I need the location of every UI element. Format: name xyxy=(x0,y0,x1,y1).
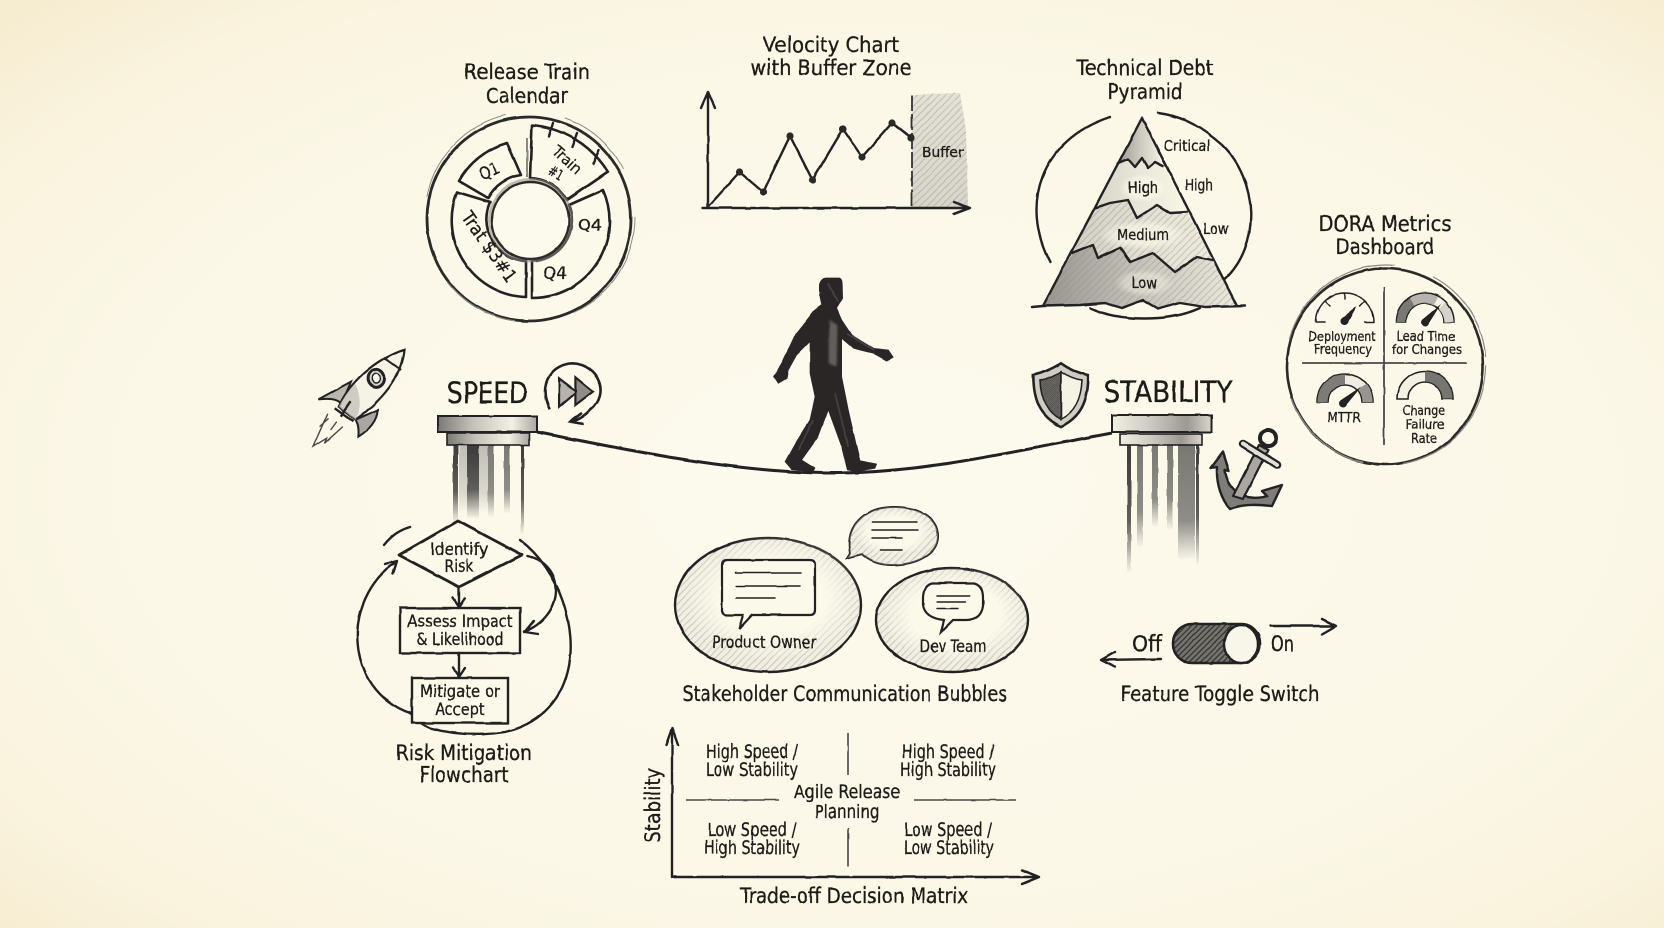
right pillar xyxy=(1112,415,1212,573)
heading: DORA metrics: DORA Metrics xyxy=(1318,212,1452,236)
label: off: Off xyxy=(1132,632,1163,656)
heading: velocity chart: Velocity Chart xyxy=(763,33,899,57)
quadrant: low speed low stability: Low Stability xyxy=(904,838,994,859)
heading: risk mitigation flowchart xyxy=(396,741,532,787)
step: assess impact: Assess Impact xyxy=(408,612,513,631)
step: assess impact xyxy=(400,608,520,653)
heading: release train calendar xyxy=(464,60,590,108)
tightrope xyxy=(537,432,1112,473)
pyramid labels: Low xyxy=(1203,220,1229,238)
calendar wheel: #1 xyxy=(545,163,566,185)
heading: trade-off decision matrix: Trade-off Decision Matrix xyxy=(739,884,968,908)
gauge: lead time for changes: for Changes xyxy=(1392,342,1462,358)
bubble: product owner: Product Owner xyxy=(712,633,816,652)
pyramid layers xyxy=(1032,118,1245,309)
panel: trade-off decision matrix xyxy=(641,728,1039,908)
pyramid circle xyxy=(1036,113,1251,318)
heading: risk mitigation flowchart: Risk Mitigation xyxy=(396,741,532,765)
arrow: off xyxy=(1101,652,1161,667)
heading: DORA metrics xyxy=(1318,212,1452,259)
heading: release train calendar: Calendar xyxy=(486,84,568,108)
heading: feature toggle switch: Feature Toggle Switch xyxy=(1120,682,1320,706)
quadrant: low speed high stability: High Stability xyxy=(704,838,800,859)
label: on: On xyxy=(1271,632,1294,656)
pyramid labels: Low xyxy=(1131,274,1157,292)
arrow: curved right xyxy=(524,556,556,634)
calendar wheel xyxy=(425,112,635,322)
quadrant: low speed high stability xyxy=(704,820,800,859)
calendar wheel: Q1 xyxy=(476,159,503,185)
axis label: stability: Stability xyxy=(641,768,665,842)
matrix axes xyxy=(666,728,1039,884)
icon: shield xyxy=(1033,363,1088,427)
heading: stakeholder communication bubbles: Stakeholder Communication Bubbles xyxy=(682,682,1008,706)
gauge: deployment frequency: Frequency xyxy=(1314,342,1372,358)
quadrant: high speed low stability: High Speed / xyxy=(706,742,799,763)
panel: velocity chart xyxy=(701,33,970,214)
matrix dividers xyxy=(686,733,1016,867)
pyramid labels: Critical xyxy=(1164,137,1210,155)
panel: DORA metrics dashboard xyxy=(1286,212,1486,465)
decision: identify risk: Risk xyxy=(444,557,474,576)
heading: risk mitigation flowchart: Flowchart xyxy=(420,763,508,787)
toggle body xyxy=(1173,624,1260,663)
decision: identify risk xyxy=(399,521,522,587)
dashboard circle xyxy=(1286,265,1486,465)
gauge: lead time for changes xyxy=(1392,293,1462,358)
quadrant: high speed low stability: Low Stability xyxy=(706,760,798,781)
icon: rocket xyxy=(313,349,404,447)
center label: agile release planning: Agile Release xyxy=(794,781,900,803)
gauge: change failure rate: Change xyxy=(1403,403,1445,419)
gauge: change failure rate xyxy=(1397,371,1453,447)
pyramid labels xyxy=(1117,137,1229,292)
arrow: identify to assess xyxy=(453,587,465,607)
calendar wheel: Train xyxy=(548,141,586,178)
quadrant: low speed low stability xyxy=(904,820,994,859)
step: assess impact: & Likelihood xyxy=(416,630,504,649)
heading: technical debt pyramid: Technical Debt xyxy=(1076,56,1214,80)
step: mitigate or accept xyxy=(412,678,508,723)
gauge: deployment frequency: Deployment xyxy=(1308,329,1376,345)
quadrant: high speed high stability xyxy=(900,742,996,781)
quadrant: high speed high stability: High Stability xyxy=(900,760,996,781)
buffer zone: Buffer xyxy=(922,145,964,161)
bubble: top message xyxy=(847,507,938,565)
gauge: MTTR: MTTR xyxy=(1327,410,1361,426)
gauge: MTTR xyxy=(1317,374,1373,426)
arrow: on xyxy=(1271,619,1336,634)
bubble: dev team: Dev Team xyxy=(920,637,986,656)
quadrant: low speed low stability: Low Speed / xyxy=(904,820,993,841)
velocity line with points xyxy=(708,119,915,207)
calendar wheel: Trat $3#1 xyxy=(456,207,521,287)
enclosing circle xyxy=(384,527,571,734)
gauge: lead time for changes: Lead Time xyxy=(1396,329,1456,345)
decision: identify risk: Identify xyxy=(430,540,488,559)
pyramid labels: High xyxy=(1128,178,1158,197)
bubble: dev team xyxy=(876,567,1028,672)
bubble: product owner xyxy=(675,536,861,672)
gauge: change failure rate: Rate xyxy=(1411,431,1437,447)
quadrant: low speed high stability: Low Speed / xyxy=(708,820,797,841)
step: mitigate or accept: Mitigate or xyxy=(420,682,500,701)
panel: feature toggle switch xyxy=(1101,619,1336,706)
heading: DORA metrics: Dashboard xyxy=(1336,235,1434,259)
icon: fast forward xyxy=(545,363,601,424)
heading: technical debt pyramid xyxy=(1076,56,1214,104)
calendar wheel: Q4 xyxy=(544,264,566,284)
heading: technical debt pyramid: Pyramid xyxy=(1108,80,1182,104)
step: mitigate or accept: Accept xyxy=(436,700,485,719)
buffer zone xyxy=(912,93,968,207)
pyramid labels: Medium xyxy=(1117,226,1169,244)
heading: SPEED: SPEED xyxy=(447,376,528,410)
panel: stakeholder communication bubbles xyxy=(675,507,1028,706)
arrow: assess to mitigate xyxy=(453,653,465,677)
heading: velocity chart xyxy=(750,33,912,80)
panel: release train calendar xyxy=(425,60,635,322)
panel: risk mitigation flowchart xyxy=(357,521,571,787)
panel: technical debt pyramid xyxy=(1032,56,1251,318)
left pillar xyxy=(438,416,537,535)
center label: agile release planning: Planning xyxy=(814,801,880,823)
heading: velocity chart: with Buffer Zone xyxy=(750,56,912,80)
gauge: deployment frequency xyxy=(1308,293,1376,358)
center label: agile release planning xyxy=(794,781,900,823)
heading: release train calendar: Release Train xyxy=(464,60,590,84)
icon: anchor xyxy=(1211,430,1282,509)
heading: STABILITY: STABILITY xyxy=(1104,375,1233,409)
chart axes xyxy=(701,92,970,214)
figure: tightrope walker xyxy=(774,278,893,472)
gauge: change failure rate: Failure xyxy=(1406,417,1444,433)
arrow: curved left xyxy=(357,561,410,713)
pyramid labels: High xyxy=(1185,176,1213,194)
quadrant: high speed high stability: High Speed / xyxy=(902,742,995,763)
calendar wheel: Q4 xyxy=(578,216,602,234)
quadrant: high speed low stability xyxy=(706,742,799,781)
